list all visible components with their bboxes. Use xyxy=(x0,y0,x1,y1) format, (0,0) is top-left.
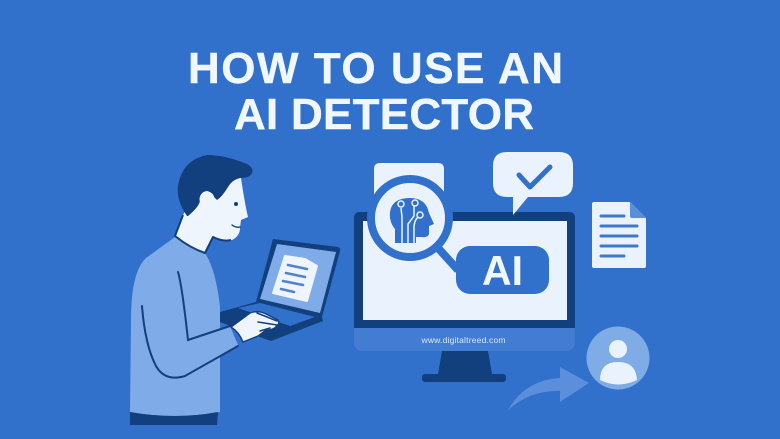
document icon xyxy=(592,202,646,268)
person with laptop xyxy=(130,155,340,425)
monitor frame xyxy=(354,212,575,328)
document on laptop screen xyxy=(273,256,317,301)
website url: www.digitaltreed.com xyxy=(420,335,506,345)
paper behind magnifier xyxy=(374,163,444,200)
speech bubble with check mark xyxy=(493,152,573,215)
desktop monitor xyxy=(354,212,575,382)
torso and sweater xyxy=(130,237,220,416)
monitor screen xyxy=(363,221,567,320)
AI brain head icon xyxy=(390,198,434,243)
hair xyxy=(178,155,252,216)
curved arrow xyxy=(508,367,589,410)
eye and mouth xyxy=(234,202,238,206)
hand xyxy=(231,312,279,342)
laptop base xyxy=(220,302,323,341)
sleeve xyxy=(142,272,238,378)
user avatar xyxy=(586,326,650,390)
laptop screen xyxy=(256,239,340,317)
monitor chin xyxy=(354,326,575,351)
sweater hem xyxy=(130,412,218,425)
AI label pill: AI xyxy=(482,247,523,294)
title xyxy=(188,44,563,139)
title: AI DETECTOR xyxy=(234,90,534,139)
monitor stand xyxy=(438,351,492,374)
AI label pill xyxy=(456,246,549,294)
ear xyxy=(200,192,214,206)
neck and face xyxy=(175,175,248,253)
magnifying glass with AI head icon xyxy=(371,179,458,270)
title: HOW TO USE AN xyxy=(188,44,563,93)
